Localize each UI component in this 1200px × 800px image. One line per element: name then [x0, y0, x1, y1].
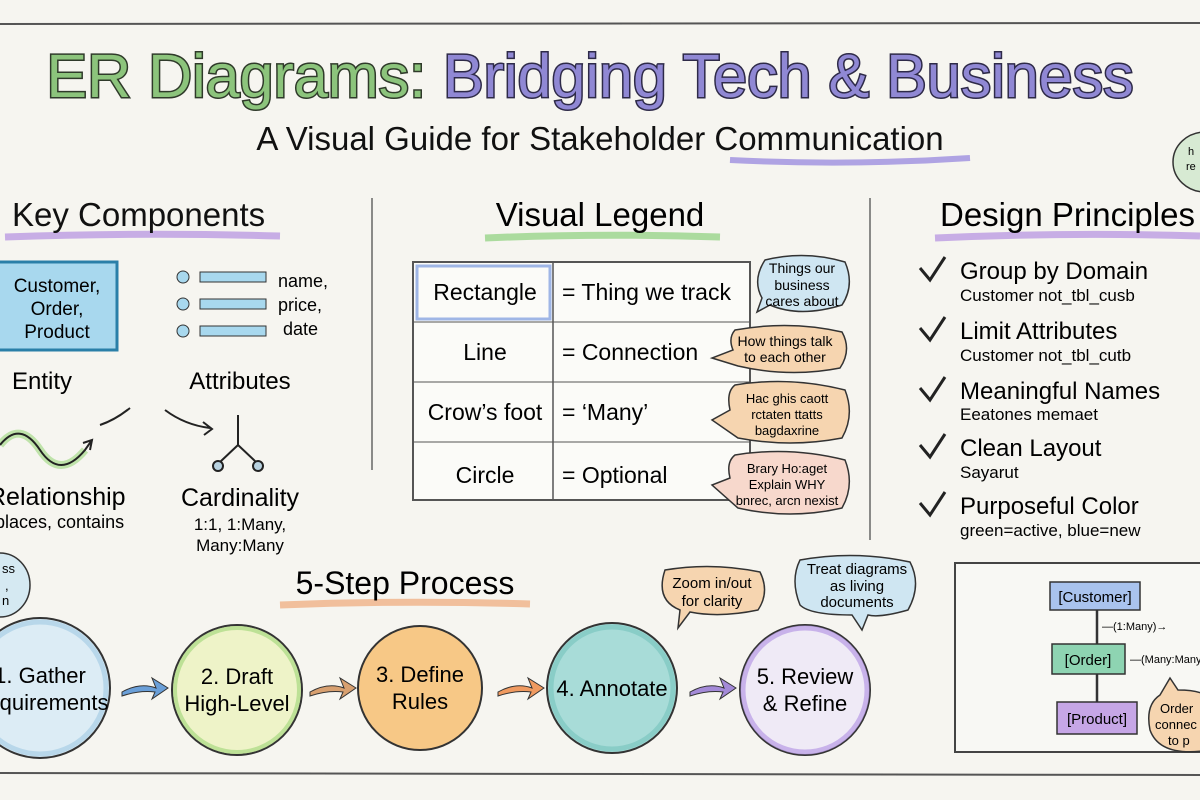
- cardinality icon: [165, 410, 263, 471]
- callout: how things talk: to each other: [744, 349, 826, 365]
- callout: explain why: Explain WHY: [749, 477, 826, 492]
- arrow 1-2: [122, 678, 168, 699]
- step 1: [0, 618, 110, 758]
- callout: left partial: ss: [2, 561, 16, 576]
- mini ER diagram: connec: [1155, 717, 1197, 732]
- legend table: Crow’s foot: [428, 399, 543, 425]
- callout: left partial: ,: [5, 578, 9, 593]
- step 2: 2. Draft: [201, 664, 273, 689]
- callout: how things talk: How things talk: [738, 333, 833, 349]
- step 5: [740, 625, 870, 755]
- attributes icon: date: [283, 319, 318, 339]
- callout: crow's foot note: bagdaxrine: [755, 423, 819, 438]
- entity icon: Product: [24, 322, 90, 343]
- step 3: 3. Define: [376, 662, 464, 687]
- subtitle: A Visual Guide for Stakeholder Communication: [256, 120, 944, 157]
- mini ER diagram: [Product]: [1067, 711, 1127, 728]
- label: Attributes: Attributes: [189, 368, 291, 395]
- mini ER diagram: to p: [1168, 733, 1190, 748]
- arrow 2-3: [310, 678, 356, 699]
- label: Cardinality: Many:Many: [196, 536, 284, 555]
- step 2: [172, 625, 302, 755]
- callout: crow's foot note: Hac ghis caott: [746, 391, 829, 406]
- callout: explain why: Brary Ho:aget: [747, 461, 827, 476]
- callout: how things talk: [712, 325, 847, 373]
- callout: left partial: [0, 553, 30, 617]
- heading: Key Components: Key Components: [12, 196, 265, 233]
- callout: treat diagrams: [795, 555, 916, 630]
- step 5: 5. Review: [757, 664, 853, 689]
- callout: crow's foot note: rctaten ttatts: [751, 407, 823, 422]
- callout: things our business: Things our: [769, 260, 835, 276]
- legend table: Line: [463, 339, 507, 365]
- callout: things our business: cares about: [765, 293, 839, 309]
- entity icon: [0, 262, 117, 350]
- callout: zoom in/out: [662, 566, 765, 628]
- mini ER diagram: [955, 563, 1200, 752]
- callout: explain why: [712, 451, 849, 514]
- callout: treat diagrams: Treat diagrams: [807, 561, 907, 578]
- callout: zoom in/out: Zoom in/out: [672, 575, 752, 592]
- mini ER diagram: [Customer]: [1058, 589, 1132, 606]
- principles list: Purposeful Color: [960, 493, 1139, 520]
- label: Relationship: [0, 483, 126, 532]
- label: Entity: Entity: [12, 368, 72, 395]
- principles list: Customer not_tbl_cutb: [960, 346, 1131, 365]
- legend table: = ‘Many’: [562, 399, 648, 425]
- callout: top right partial: h: [1188, 146, 1194, 158]
- legend table: Circle: [456, 462, 514, 488]
- attributes icon: price,: [278, 295, 322, 315]
- principles list: [920, 257, 1160, 540]
- mini ER diagram: Order: [1160, 701, 1194, 716]
- callout: explain why: bnrec, arcn nexist: [736, 493, 839, 508]
- attributes icon: [177, 271, 328, 339]
- callout: things our business: [757, 255, 849, 312]
- step 3: Rules: [392, 689, 448, 714]
- principles list: Group by Domain: [960, 258, 1148, 285]
- label: Cardinality: [181, 484, 300, 555]
- step 3: [358, 626, 482, 750]
- entity icon: Customer,: [14, 276, 100, 297]
- mini ER diagram: —(1:Many)→: [1102, 621, 1167, 633]
- legend table: = Connection: [562, 339, 698, 365]
- label: Cardinality: Cardinality: [181, 484, 300, 512]
- step 5: & Refine: [763, 691, 847, 716]
- principles list: Sayarut: [960, 463, 1019, 482]
- legend table: Rectangle: [433, 279, 537, 305]
- step 2: High-Level: [184, 691, 290, 716]
- step 4: [547, 623, 677, 753]
- principles list: Clean Layout: [960, 435, 1102, 462]
- legend table: [413, 262, 750, 500]
- heading: 5-Step Process: 5-Step Process: [296, 565, 514, 601]
- callout: top right partial: re: [1186, 161, 1196, 173]
- step 4: 4. Annotate: [556, 676, 668, 701]
- callout: treat diagrams: as living: [830, 578, 884, 595]
- principles list: Eeatones memaet: [960, 405, 1098, 424]
- principles list: Limit Attributes: [960, 318, 1117, 345]
- callout: treat diagrams: documents: [820, 594, 894, 611]
- legend table: = Optional: [562, 462, 668, 488]
- callout: top right partial: [1173, 132, 1200, 192]
- relationship icon: [0, 408, 130, 465]
- principles list: Meaningful Names: [960, 378, 1160, 405]
- callout: crow's foot note: [712, 381, 849, 443]
- callout: zoom in/out: for clarity: [682, 593, 743, 610]
- attributes icon: name,: [278, 271, 328, 291]
- callout: left partial: n: [2, 593, 9, 608]
- principles list: Customer not_tbl_cusb: [960, 286, 1135, 305]
- heading: Design Principles: Design Principles: [940, 196, 1195, 233]
- legend table: = Thing we track: [562, 279, 731, 305]
- arrow 4-5: [690, 678, 736, 699]
- principles list: green=active, blue=new: [960, 521, 1141, 540]
- title: ER Diagrams: Bridging Tech & Business: [46, 42, 1134, 110]
- arrow 3-4: [498, 678, 544, 699]
- entity icon: Order,: [31, 299, 83, 320]
- mini ER diagram: [Order]: [1065, 652, 1111, 669]
- heading: Visual Legend: Visual Legend: [496, 196, 704, 233]
- callout: things our business: business: [774, 277, 830, 293]
- label: Cardinality: 1:1, 1:Many,: [194, 515, 286, 534]
